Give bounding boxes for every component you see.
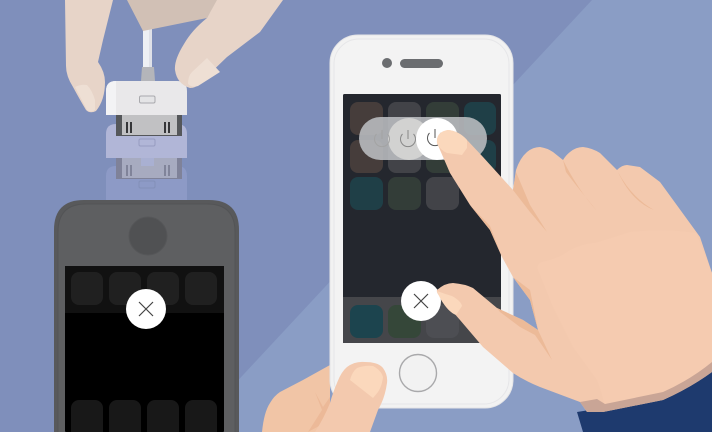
left hand, behind phone [262, 365, 330, 432]
cable [141, 25, 155, 81]
right phone [330, 35, 513, 408]
finger, top right [175, 0, 283, 88]
sleeve [577, 368, 712, 432]
cuff shadow [580, 362, 712, 412]
palm, top hand [127, 0, 218, 31]
screen [343, 94, 501, 343]
power slider [359, 117, 487, 160]
close button [126, 289, 166, 329]
home button [129, 217, 167, 255]
palm highlight [538, 230, 712, 407]
screen [65, 266, 224, 432]
close button [401, 281, 441, 321]
speaker [400, 59, 443, 68]
camera [382, 58, 392, 68]
left phone, dimmed [54, 200, 239, 432]
finger, top left [65, 0, 113, 112]
connector [106, 81, 187, 136]
finger creases [513, 172, 547, 232]
right hand [437, 130, 712, 412]
home button [400, 354, 436, 392]
ghost connector lower [106, 166, 187, 200]
ghost connector upper [106, 124, 187, 179]
thumb, left hand [315, 362, 387, 432]
